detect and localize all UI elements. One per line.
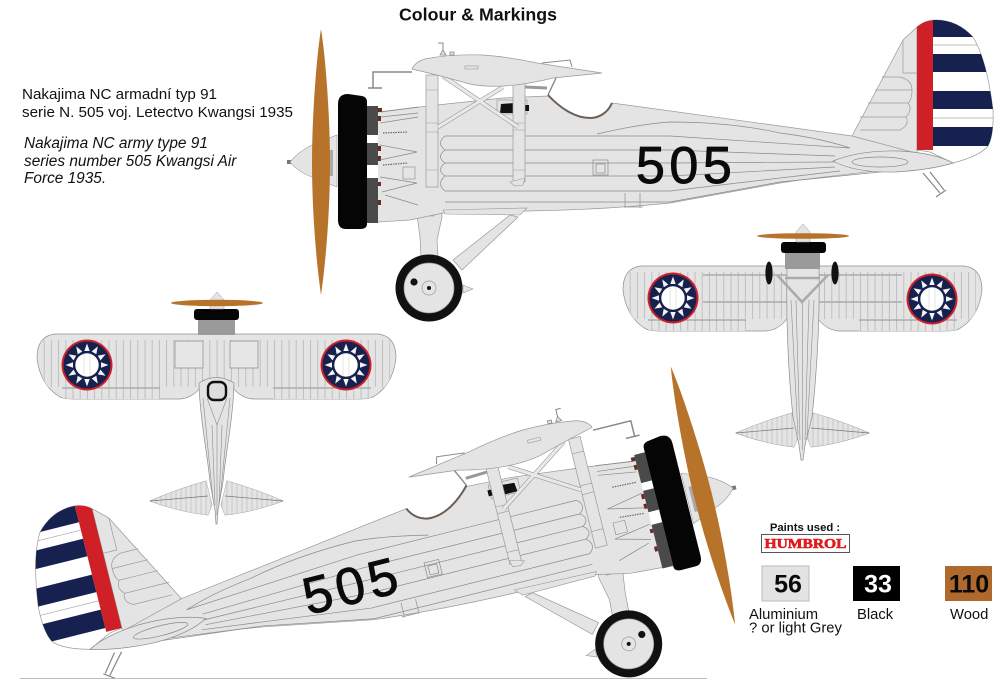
swatch 56: [762, 566, 809, 601]
swatch 56: 56: [774, 570, 802, 598]
propeller: [312, 29, 330, 295]
aircraft: left side profile: [287, 18, 998, 322]
wing: [623, 266, 982, 331]
propeller: [757, 233, 849, 239]
serial number 505: 505: [297, 546, 408, 627]
swatch 110: [945, 566, 992, 601]
cowling: [781, 242, 826, 253]
cowling: [642, 434, 703, 572]
cowling: [338, 94, 367, 229]
fuselage lines: [791, 300, 814, 450]
aircraft: underside view: [623, 224, 982, 460]
roundel left: [648, 272, 698, 324]
undercarriage wheel left: [765, 262, 773, 284]
engine cylinders: [785, 253, 820, 269]
propeller: [662, 364, 744, 627]
engine cylinders: [198, 320, 235, 335]
upper wing: [368, 43, 602, 88]
ground line: [20, 678, 707, 680]
label black: Black: [857, 607, 894, 623]
cockpit: [497, 78, 612, 118]
wing: [37, 334, 396, 399]
undercarriage: [396, 190, 518, 322]
undercarriage V strut: [777, 275, 828, 302]
spinner: [210, 292, 224, 309]
roundel left: [62, 340, 112, 390]
rear fuselage: [81, 572, 263, 669]
fuselage lines: [203, 398, 230, 515]
aircraft: top view: [37, 292, 396, 524]
front fuselage: [378, 96, 780, 222]
text block: Czech caption: Nakajima NC armadní typ 91: [22, 86, 217, 103]
front fuselage: [242, 445, 662, 665]
wing struts: [484, 436, 607, 569]
paints heading: Paints used :: [770, 522, 840, 534]
tailplane: [736, 412, 869, 448]
propeller: [171, 300, 263, 306]
cowling: [194, 309, 239, 320]
upper wing: [402, 391, 639, 492]
tail fin and striped rudder: [11, 484, 188, 660]
aircraft: right side profile: [11, 364, 744, 689]
wing struts: [426, 75, 525, 187]
spinner: [681, 461, 742, 524]
paints legend: [749, 522, 992, 636]
spinner: [796, 224, 810, 242]
roundel right: [906, 274, 958, 324]
wing hatch panels: [175, 341, 258, 368]
cockpit: [400, 457, 522, 523]
swatch 33: 33: [864, 570, 892, 598]
text block: Czech caption: serie N. 505 voj. Letectvo Kwangsi 1935: [22, 104, 293, 121]
spinner: [287, 135, 337, 187]
engine: [595, 452, 673, 578]
roundel right: [320, 340, 372, 390]
engine: [367, 106, 418, 223]
cockpit: [208, 382, 226, 400]
serial number 505: 505: [636, 137, 736, 195]
tail skid: [923, 172, 946, 197]
Humbrol logo: HUMBROL: [764, 537, 846, 552]
tail fin and striped rudder: [852, 18, 998, 163]
swatch 33: [853, 566, 900, 601]
text block: English caption: Force 1935.: [24, 170, 106, 187]
label aluminium: ? or light Grey: [749, 620, 843, 636]
fuselage: [787, 268, 819, 460]
fuselage: [199, 378, 234, 524]
undercarriage wheel right: [831, 262, 839, 284]
undercarriage: [519, 541, 669, 689]
label aluminium: Aluminium: [749, 607, 818, 623]
tail skid: [99, 651, 127, 681]
axle and spar lines: [703, 275, 902, 302]
title: Colour & Markings: [399, 4, 557, 24]
Humbrol logo: [762, 534, 850, 552]
label wood: Wood: [950, 607, 988, 623]
tailplane: [150, 480, 283, 516]
rear fuselage: [780, 126, 953, 183]
text block: English caption: Nakajima NC army type 91: [24, 135, 208, 152]
swatch 110: 110: [949, 570, 989, 598]
text block: English caption: series number 505 Kwangsi Air: [24, 153, 237, 170]
